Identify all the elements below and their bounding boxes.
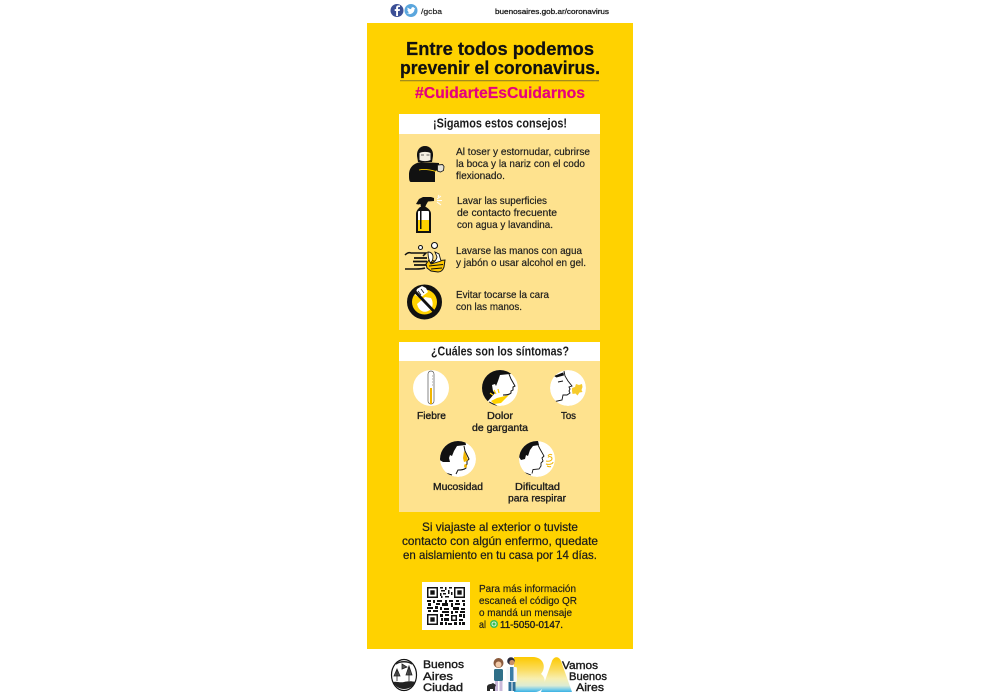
icon: fever thermometer bbox=[413, 370, 449, 406]
icon: difficulty breathing bbox=[519, 441, 555, 477]
website url: buenosaires.gob.ar/coronavirus bbox=[495, 7, 609, 16]
social handle: /gcba bbox=[421, 7, 443, 16]
icon: dog bbox=[487, 683, 496, 691]
advice heading: ¡Sigamos estos consejos! bbox=[433, 116, 567, 130]
QR instructions: o mandá un mensaje bbox=[479, 608, 572, 619]
label: fever: Fiebre bbox=[417, 411, 446, 422]
label: difficulty breathing: para respirar bbox=[508, 494, 567, 504]
logo: Vamos Buenos Aires: Aires bbox=[576, 682, 605, 694]
icon: cough bbox=[550, 370, 586, 406]
advice text: surfaces: de contacto frecuente bbox=[457, 208, 557, 219]
logo: Vamos Buenos Aires: Vamos bbox=[562, 660, 599, 672]
icon: facebook bbox=[390, 4, 404, 17]
logo: Buenos Aires Ciudad: Aires bbox=[423, 671, 454, 683]
label: sore throat: Dolor bbox=[487, 411, 514, 422]
label: cough: Tos bbox=[561, 411, 576, 422]
advice text: cough: flexionado. bbox=[456, 171, 505, 182]
isolation message bbox=[402, 520, 598, 562]
logo: Vamos Buenos Aires: Buenos bbox=[569, 671, 608, 683]
icon: child bbox=[494, 658, 504, 691]
QR instructions: Para más información bbox=[479, 584, 576, 595]
icon: coughing into elbow bbox=[409, 146, 444, 182]
isolation message: Si viajaste al exterior o tuviste bbox=[422, 520, 578, 534]
symptoms heading: ¿Cuáles son los síntomas? bbox=[431, 344, 569, 358]
icon: washing hands bbox=[405, 242, 445, 272]
QR instructions: al bbox=[479, 620, 486, 631]
icon: sore throat bbox=[482, 370, 518, 406]
logo: Buenos Aires Ciudad: Ciudad bbox=[423, 682, 463, 694]
label: runny nose: Mucosidad bbox=[433, 482, 483, 493]
logo: Buenos Aires Ciudad: Buenos bbox=[423, 659, 465, 671]
logo: Buenos Aires Ciudad bbox=[392, 659, 465, 694]
advice text: cough: la boca y la nariz con el codo bbox=[456, 159, 585, 170]
panel: advice bbox=[399, 114, 600, 330]
label: difficulty breathing bbox=[508, 482, 567, 504]
advice text: cough bbox=[456, 147, 590, 182]
label: difficulty breathing: Dificultad bbox=[515, 482, 560, 493]
advice text: cough: Al toser y estornudar, cubrirse bbox=[456, 147, 590, 158]
label: sore throat bbox=[472, 411, 528, 434]
QR code bbox=[422, 582, 470, 630]
icon: doctor bbox=[506, 657, 517, 691]
advice text: face: con las manos. bbox=[456, 302, 522, 313]
BA gradient letters bbox=[514, 657, 572, 692]
panel: yellow poster background bbox=[367, 23, 633, 649]
QR instructions: escaneá el código QR bbox=[479, 596, 577, 607]
advice text: surfaces: Lavar las superficies bbox=[457, 196, 547, 207]
crest bbox=[392, 660, 416, 690]
icon: do not touch face bbox=[410, 286, 440, 317]
isolation message: en aislamiento en tu casa por 14 días. bbox=[403, 548, 597, 562]
icon: twitter bbox=[404, 4, 418, 17]
advice text: face bbox=[456, 290, 549, 313]
icon: runny nose bbox=[438, 440, 476, 477]
title bbox=[400, 39, 600, 78]
advice text: handwashing: y jabón o usar alcohol en gel. bbox=[456, 258, 586, 269]
icon: spray bottle bbox=[416, 195, 442, 233]
advice text: handwashing bbox=[456, 246, 586, 269]
isolation message: contacto con algún enfermo, quedate bbox=[402, 534, 598, 548]
advice text: surfaces bbox=[457, 196, 557, 231]
advice text: handwashing: Lavarse las manos con agua bbox=[456, 246, 582, 257]
advice text: face: Evitar tocarse la cara bbox=[456, 290, 549, 301]
top bar: social links and website bbox=[390, 4, 609, 17]
logo: Vamos Buenos Aires bbox=[487, 657, 608, 694]
title: prevenir el coronavirus. bbox=[400, 58, 600, 78]
hashtag: #CuidarteEsCuidarnos bbox=[415, 85, 585, 102]
panel: symptoms bbox=[399, 342, 600, 512]
label: sore throat: de garganta bbox=[472, 423, 528, 434]
advice text: surfaces: con agua y lavandina. bbox=[457, 220, 553, 231]
title: Entre todos podemos bbox=[406, 39, 594, 59]
QR instructions: 11-5050-0147. bbox=[500, 620, 563, 631]
icon: whatsapp bbox=[490, 620, 498, 628]
QR instructions bbox=[479, 584, 577, 631]
